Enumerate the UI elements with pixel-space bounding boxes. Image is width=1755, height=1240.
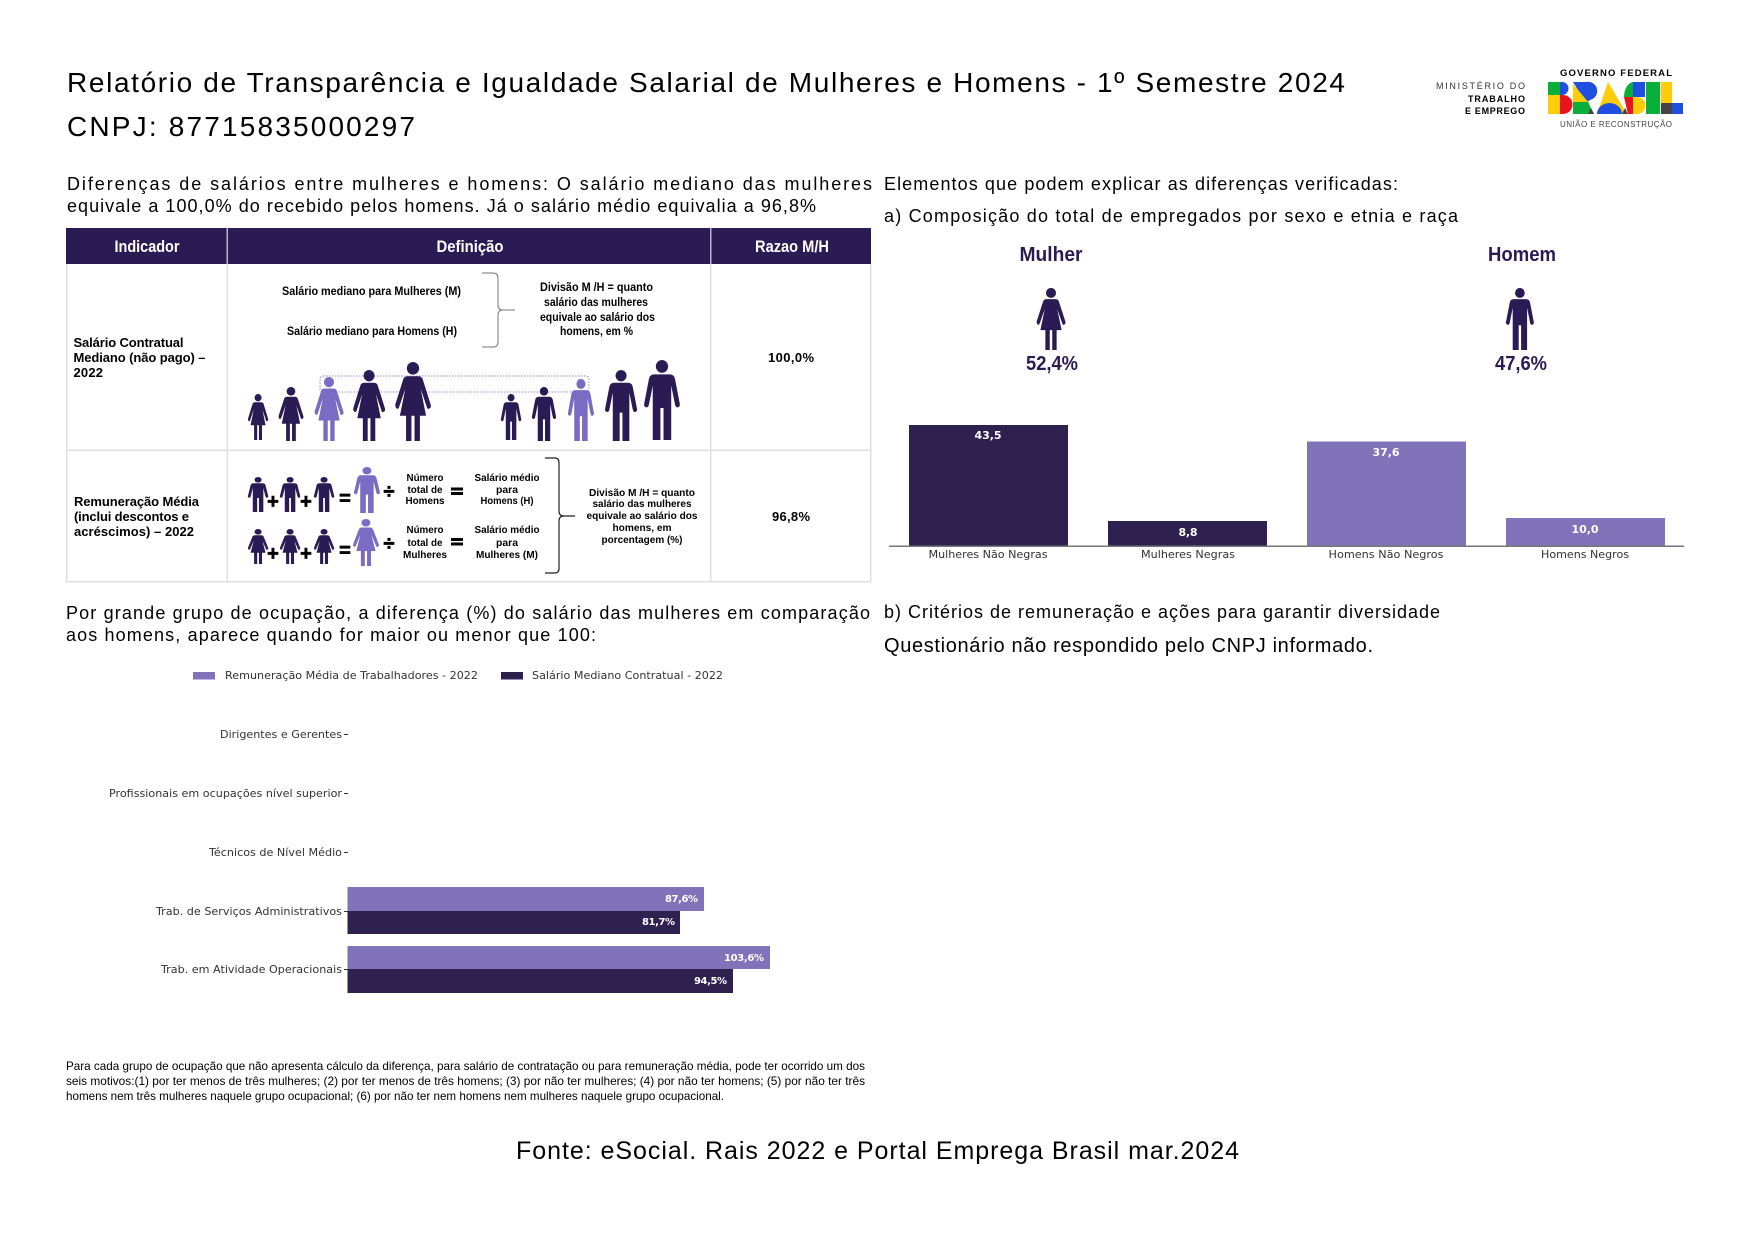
formula: men: para bbox=[496, 484, 518, 496]
footnote: homens nem três mulheres naquele grupo ocupacional; (6) por não ter nem homens nem mulheres naquele grupo ocupacional. bbox=[66, 1089, 724, 1103]
bar: Mulheres Negras: Mulheres Negras bbox=[1141, 548, 1235, 561]
formula: men: total de bbox=[408, 484, 443, 496]
formula: women: Salário médio bbox=[474, 524, 540, 536]
percentage: 47,6% bbox=[1495, 353, 1547, 375]
legend: Salário Mediano Contratual - 2022 bbox=[532, 669, 723, 682]
indicator label: (inclui descontos e bbox=[74, 509, 189, 524]
government logo: UNIÃO E RECONSTRUÇÃO bbox=[1560, 120, 1672, 129]
government logo bbox=[1548, 68, 1683, 129]
formula: men: Homens (H) bbox=[480, 495, 534, 507]
category labels: Dirigentes e Gerentes bbox=[220, 728, 342, 741]
bar chart: occupation groups bbox=[109, 669, 770, 993]
ministry name bbox=[1436, 81, 1525, 116]
division explanation: equivale ao salário dos bbox=[586, 510, 698, 522]
heading: occupation groups: aos homens, aparece quando for maior ou menor que 100: bbox=[66, 625, 596, 645]
footnote: Para cada grupo de ocupação que não apresenta cálculo da diferença, para salário de contratação ou para remuneração média, pode ter ocorrido um dos bbox=[66, 1059, 865, 1073]
heading: occupation groups: Por grande grupo de ocupação, a diferença (%) do salário das mulheres em comparação bbox=[66, 603, 870, 623]
formula: women: Número bbox=[406, 524, 444, 536]
formula: men: = bbox=[339, 488, 351, 510]
division explanation: equivale ao salário dos bbox=[540, 312, 655, 324]
median salary captions bbox=[282, 286, 461, 338]
indicator label bbox=[74, 335, 206, 380]
icons: women ordered by salary bbox=[248, 362, 431, 441]
division explanation: homens, em bbox=[612, 522, 672, 534]
division explanation bbox=[540, 282, 655, 338]
division explanation: homens, em % bbox=[560, 326, 633, 338]
indicator label: acréscimos) – 2022 bbox=[74, 524, 194, 539]
bar: Homens Negros: Homens Negros bbox=[1541, 548, 1629, 561]
title bbox=[67, 67, 1345, 142]
median salary captions: Salário mediano para Mulheres (M) bbox=[282, 286, 461, 298]
formula: men: + bbox=[300, 491, 312, 513]
footnote: seis motivos:(1) por ter menos de três mulheres; (2) por ter menos de três homens; (3) por não ter mulheres; (4) por não ter homens; (5) por não ter três bbox=[66, 1074, 865, 1088]
intro text: salary differences: equivale a 100,0% do recebido pelos homens. Já o salário médio equivalia a 96,8% bbox=[67, 196, 816, 216]
median highlight box bbox=[320, 376, 589, 392]
heading: Mulher bbox=[1020, 244, 1083, 266]
category labels: Profissionais em ocupações nível superior bbox=[109, 787, 342, 800]
row: median contractual salary bbox=[74, 273, 814, 441]
intro text: salary differences: Diferenças de salários entre mulheres e homens: O salário mediano das mulheres bbox=[67, 174, 872, 194]
indicator label: Remuneração Média bbox=[74, 494, 200, 509]
heading: explaining elements: a) Composição do total de empregados por sexo e etnia e raça bbox=[884, 206, 1459, 226]
formula: women: para bbox=[496, 537, 518, 549]
panel: indicator table bbox=[66, 228, 872, 582]
bar chart: composition by sex and race bbox=[889, 425, 1684, 561]
bar: Homens Negros bbox=[1506, 518, 1665, 561]
bars: operational activities: 103,6% bbox=[724, 953, 764, 964]
table header: Definição bbox=[436, 238, 504, 256]
heading: Homem bbox=[1488, 244, 1556, 266]
formula: women: Mulheres bbox=[403, 549, 447, 561]
formula: women: + bbox=[267, 543, 279, 565]
bar: Mulheres Não Negras bbox=[909, 425, 1068, 561]
formula: women bbox=[248, 519, 540, 566]
division explanation: salário das mulheres bbox=[544, 297, 648, 309]
division explanation: salário das mulheres bbox=[592, 498, 692, 510]
division explanation bbox=[586, 487, 698, 546]
panel: woman share bbox=[1020, 244, 1083, 375]
indicator label bbox=[74, 494, 200, 539]
legend: Remuneração Média de Trabalhadores - 2022 bbox=[225, 669, 478, 682]
indicator label: Salário Contratual bbox=[74, 335, 184, 350]
bar: Homens Negros: 10,0 bbox=[1572, 523, 1599, 536]
bars: operational activities: 94,5% bbox=[694, 976, 727, 987]
category labels: Trab. de Serviços Administrativos bbox=[155, 905, 342, 918]
heading: occupation groups bbox=[66, 603, 870, 645]
bars: administrative services: 81,7% bbox=[642, 917, 675, 928]
bar: Mulheres Negras: 8,8 bbox=[1178, 526, 1198, 539]
formula: men: ÷ bbox=[384, 481, 395, 503]
footnote bbox=[66, 1059, 865, 1103]
formula: men: Salário médio bbox=[474, 472, 540, 484]
bracket bbox=[482, 273, 515, 347]
bar: Mulheres Não Negras: 43,5 bbox=[974, 429, 1002, 442]
formula: men: Número bbox=[406, 472, 444, 484]
bar: Homens Não Negros: Homens Não Negros bbox=[1328, 548, 1444, 561]
title: CNPJ: 87715835000297 bbox=[67, 111, 415, 142]
bar: Mulheres Negras bbox=[1108, 521, 1267, 561]
heading: remuneration criteria: b) Critérios de remuneração e ações para garantir diversidade bbox=[884, 602, 1440, 622]
division explanation: porcentagem (%) bbox=[602, 534, 682, 546]
median salary captions: Salário mediano para Homens (H) bbox=[287, 326, 457, 338]
bars: administrative services: 87,6% bbox=[665, 894, 698, 905]
bars: administrative services bbox=[348, 887, 704, 934]
formula: women: ÷ bbox=[384, 533, 395, 555]
table header: Indicador bbox=[114, 238, 180, 256]
formula: men: Homens bbox=[406, 495, 445, 507]
formula: men bbox=[248, 467, 539, 513]
heading: explaining elements bbox=[884, 174, 1459, 226]
heading: explaining elements: Elementos que podem explicar as diferenças verificadas: bbox=[884, 174, 1398, 194]
division explanation: Divisão M /H = quanto bbox=[589, 487, 695, 499]
title: Relatório de Transparência e Igualdade Salarial de Mulheres e Homens - 1º Semestre 2024 bbox=[67, 67, 1345, 98]
bar: Homens Não Negros bbox=[1307, 442, 1466, 561]
formula: women: total de bbox=[408, 537, 443, 549]
formula: women: Mulheres (M) bbox=[476, 549, 538, 561]
intro text: salary differences bbox=[67, 174, 872, 216]
formula: women: = bbox=[339, 540, 351, 562]
icons: men ordered by salary bbox=[501, 360, 680, 441]
ministry name: E EMPREGO bbox=[1465, 106, 1525, 116]
formula: men: + bbox=[267, 491, 279, 513]
indicator label: Mediano (não pago) – bbox=[74, 350, 206, 365]
category labels: Técnicos de Nível Médio bbox=[208, 846, 342, 859]
government logo: GOVERNO FEDERAL bbox=[1560, 68, 1672, 79]
formula: women: + bbox=[300, 543, 312, 565]
source line: Fonte: eSocial. Rais 2022 e Portal Emprega Brasil mar.2024 bbox=[516, 1137, 1239, 1165]
division explanation: Divisão M /H = quanto bbox=[540, 282, 653, 294]
bars: operational activities bbox=[348, 946, 770, 993]
category labels bbox=[109, 728, 342, 976]
ratio value: 96,8% bbox=[772, 509, 810, 524]
logo: ministry and government bbox=[1436, 68, 1683, 129]
percentage: 52,4% bbox=[1026, 353, 1078, 375]
table header: Razao M/H bbox=[755, 238, 829, 256]
bar: Mulheres Não Negras: Mulheres Não Negras bbox=[928, 548, 1048, 561]
bar: Homens Não Negros: 37,6 bbox=[1372, 446, 1400, 459]
indicator label: 2022 bbox=[74, 365, 103, 380]
legend bbox=[193, 669, 723, 682]
ministry name: TRABALHO bbox=[1468, 94, 1525, 104]
ministry name: MINISTÉRIO DO bbox=[1436, 81, 1525, 91]
bracket bbox=[545, 458, 575, 573]
text: questionnaire status: Questionário não respondido pelo CNPJ informado. bbox=[884, 635, 1373, 657]
panel: man share bbox=[1488, 244, 1556, 375]
category labels: Trab. em Atividade Operacionais bbox=[160, 963, 342, 976]
table header bbox=[66, 228, 871, 264]
icon: woman bbox=[1037, 288, 1066, 350]
ratio value: 100,0% bbox=[768, 350, 814, 365]
icon: man bbox=[1506, 288, 1534, 350]
row: average remuneration bbox=[74, 458, 810, 573]
